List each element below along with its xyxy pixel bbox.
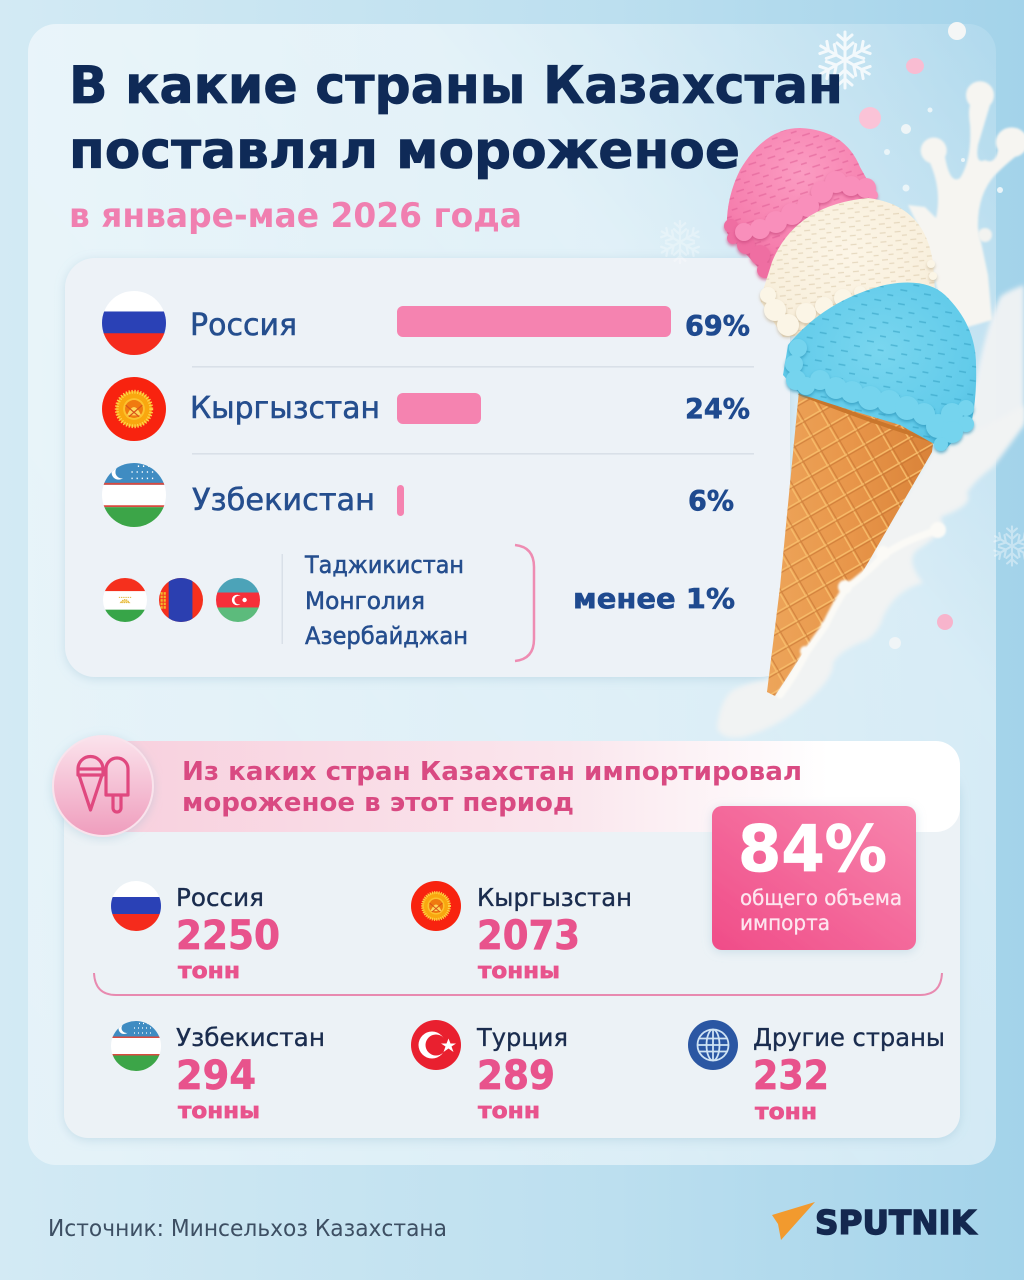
row: Uzbekistan: Узбекистан [192, 483, 375, 518]
pink scoop [724, 128, 878, 278]
row: Kyrgyzstan: 24% [685, 392, 750, 425]
callout: 84% [712, 806, 916, 950]
callout: 84%: импорта [740, 911, 830, 935]
row: less than 1%: Монголия [305, 587, 425, 615]
row: Russia: Россия [190, 308, 297, 343]
heading: import: Из каких стран Казахстан импортировал [182, 757, 802, 787]
callout: 84%: 84% [738, 813, 887, 887]
panel: import volumes [53, 736, 960, 1138]
row: less than 1% [103, 545, 735, 661]
title: поставлял мороженое [69, 121, 740, 181]
subtitle: в январе-мае 2026 года [69, 196, 522, 236]
item: other countries 232: 232 [753, 1053, 829, 1099]
item: Russia 2250: 2250 [176, 913, 280, 959]
callout: 84%: общего объема [740, 886, 902, 910]
source: Источник: Минсельхоз Казахстана [48, 1216, 447, 1242]
title [69, 56, 843, 181]
milk crest along the cone [780, 522, 946, 695]
title: В какие страны Казахстан [69, 56, 843, 116]
item: other countries 232: Другие страны [753, 1023, 945, 1052]
blue scoop [783, 283, 976, 451]
panel: export shares [65, 258, 790, 677]
row: Kyrgyzstan [102, 377, 750, 441]
item: Uzbekistan 294: тонны [178, 1099, 260, 1124]
item: Turkey 289: тонн [478, 1099, 540, 1124]
waffle cone [767, 391, 934, 696]
item: Turkey 289: 289 [477, 1053, 555, 1099]
cream scoop [760, 198, 937, 337]
snowflakes [659, 32, 1024, 566]
item: other countries 232 [688, 1020, 945, 1125]
row: Russia [102, 291, 750, 355]
item: Russia 2250: тонн [178, 959, 240, 984]
heading: import [182, 757, 802, 818]
item: other countries 232: тонн [755, 1100, 817, 1125]
item: Russia 2250 [111, 881, 280, 984]
item: Uzbekistan 294 [111, 1021, 325, 1124]
logo: Sputnik: SPUTNIK [815, 1203, 977, 1242]
heading: import: мороженое в этот период [182, 788, 574, 818]
item: Kyrgyzstan 2073 [411, 881, 632, 984]
item: Uzbekistan 294: Узбекистан [176, 1023, 325, 1052]
row: Russia: 69% [685, 309, 750, 342]
item: Turkey 289 [411, 1020, 568, 1124]
item: Uzbekistan 294: 294 [176, 1053, 256, 1099]
item: Turkey 289: Турция [476, 1023, 568, 1052]
milk splash [717, 81, 1024, 738]
icon: ice cream badge [53, 736, 153, 836]
row: Uzbekistan: 6% [688, 484, 734, 517]
row: less than 1%: Азербайджан [305, 622, 468, 650]
row: less than 1%: Таджикистан [304, 551, 464, 579]
item: Russia 2250: Россия [176, 883, 264, 912]
row: Kyrgyzstan: Кыргызстан [190, 391, 380, 426]
item: Kyrgyzstan 2073: Кыргызстан [477, 883, 632, 912]
row: less than 1%: менее 1% [573, 582, 735, 615]
import header bar [85, 741, 960, 832]
item: Kyrgyzstan 2073: тонны [478, 959, 560, 984]
row: Uzbekistan [102, 463, 734, 527]
item: Kyrgyzstan 2073: 2073 [477, 913, 580, 959]
illustration: ice cream with milk splash [659, 22, 1024, 738]
droplets [859, 22, 1003, 649]
